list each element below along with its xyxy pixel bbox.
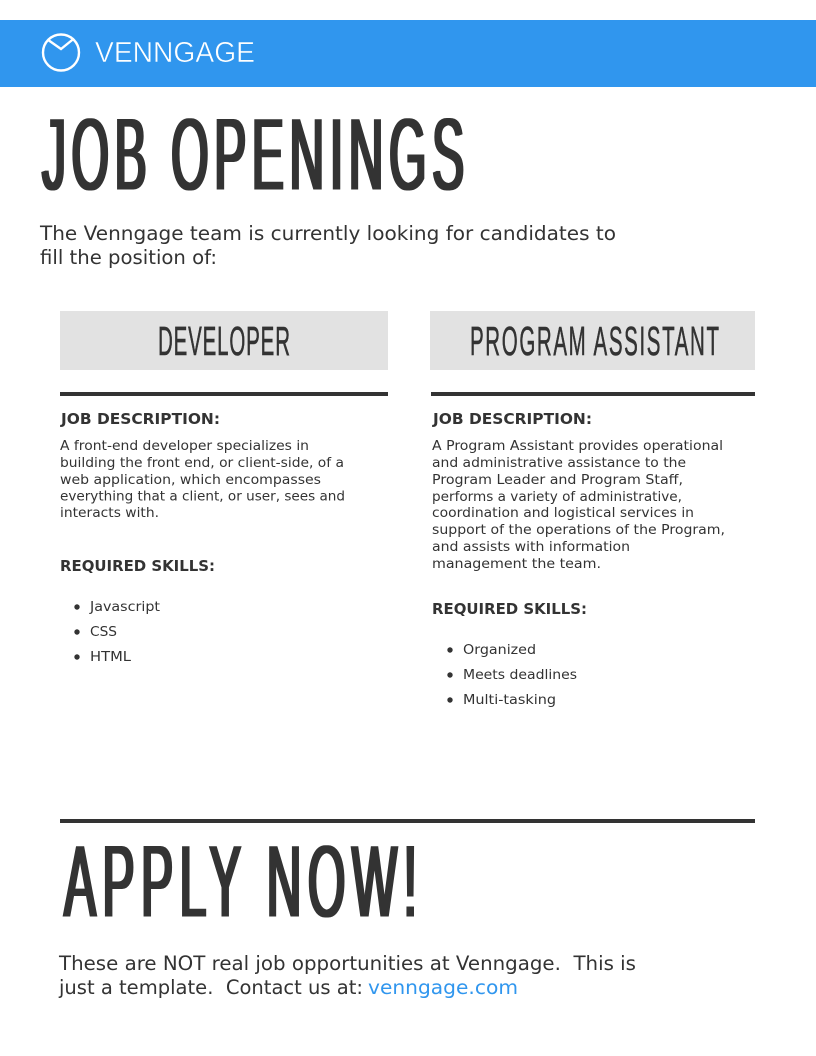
developer description: building the front end, or client-side, of a xyxy=(60,456,344,471)
program assistant description: performs a variety of administrative, xyxy=(432,490,682,505)
program assistant description: coordination and logistical services in xyxy=(432,506,694,521)
program assistant description: support of the operations of the Program, xyxy=(432,523,725,538)
developer description: interacts with. xyxy=(60,506,159,521)
heading: required skills: REQUIRED SKILLS: xyxy=(60,557,215,575)
program assistant description xyxy=(432,439,725,572)
panel: developer xyxy=(60,311,388,665)
program assistant description: A Program Assistant provides operational xyxy=(432,439,723,454)
intro text: fill the position of: xyxy=(40,246,217,269)
program assistant description: Program Leader and Program Staff, xyxy=(432,473,683,488)
heading: required skills: REQUIRED SKILLS: xyxy=(432,600,587,618)
developer description: web application, which encompasses xyxy=(60,473,321,488)
job title box: developer: DEVELOPER xyxy=(158,318,290,364)
program assistant skills list: Multi-tasking xyxy=(463,693,556,708)
developer skills list: Javascript xyxy=(89,600,160,615)
program assistant skills list xyxy=(447,643,577,708)
footer note: These are NOT real job opportunities at Venngage. This is xyxy=(58,952,636,975)
footer note: just a template. Contact us at: xyxy=(58,976,363,999)
intro text xyxy=(39,222,616,269)
icon: venngage logo xyxy=(43,34,79,70)
heading: job description: JOB DESCRIPTION: xyxy=(432,410,592,428)
developer description: everything that a client, or user, sees and xyxy=(60,490,345,504)
footer note xyxy=(58,952,636,999)
developer description: A front-end developer specializes in xyxy=(60,439,309,454)
program assistant description: and assists with information xyxy=(432,540,630,555)
program assistant description: management the team. xyxy=(432,557,601,572)
heading: job description: JOB DESCRIPTION: xyxy=(60,410,220,428)
title: JOB OPENINGS xyxy=(42,97,464,211)
panel: program assistant xyxy=(430,311,755,708)
footer note: venngage.com xyxy=(368,976,518,999)
developer skills list: HTML xyxy=(90,650,132,665)
job title box: program assistant xyxy=(430,311,755,370)
job title box: developer xyxy=(60,311,388,370)
developer skills list: CSS xyxy=(90,625,117,640)
job title box: program assistant: PROGRAM ASSISTANT xyxy=(470,318,719,364)
program assistant description: and administrative assistance to the xyxy=(432,456,686,471)
brand name: VENNGAGE xyxy=(95,37,255,69)
developer skills list xyxy=(74,600,160,665)
developer description xyxy=(60,439,345,521)
program assistant skills list: Meets deadlines xyxy=(463,668,577,683)
program assistant skills list: Organized xyxy=(463,643,536,658)
apply now heading: APPLY NOW! xyxy=(64,825,417,938)
header band xyxy=(0,20,816,87)
intro text: The Venngage team is currently looking for candidates to xyxy=(39,222,616,245)
